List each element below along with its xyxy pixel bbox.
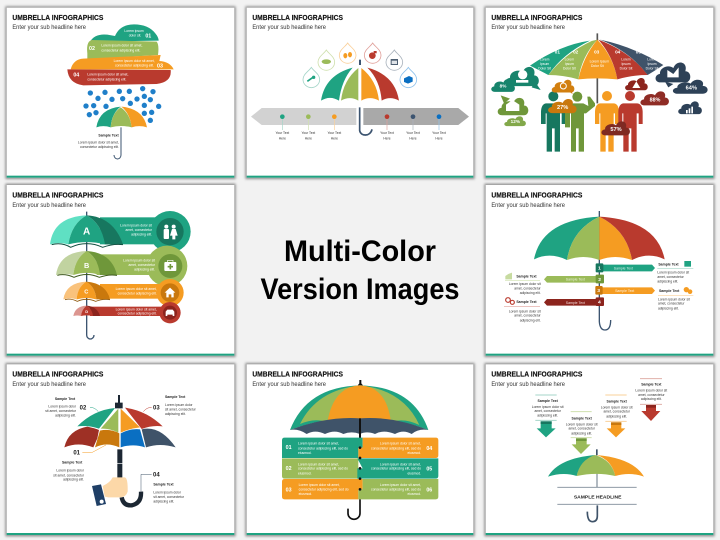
row D: Lorem ipsum dolor sit amet,: [116, 307, 157, 311]
small umbrella: [96, 107, 147, 159]
box labels: Lorem ipsum dolor sit amet,: [380, 483, 421, 487]
row D: consectetur adipiscing elit.: [118, 312, 157, 316]
timeline labels: Your Text: [432, 131, 446, 135]
box labels: eiusmod.: [298, 471, 312, 475]
tag 1: 1: [598, 266, 601, 272]
label 01: Lorem ipsum dolor: [56, 469, 85, 473]
row C: consectetur adipiscing elit.: [118, 292, 157, 296]
title: UMBRELLA INFOGRAPHICS: [252, 13, 343, 22]
box labels: consectetur adipiscing elit, sed do: [298, 446, 348, 450]
row B: adipiscing elit.: [134, 267, 155, 271]
label 03: 03: [153, 406, 160, 412]
label 04: sit amet, consectetur: [153, 495, 185, 499]
row D: D: [85, 309, 88, 314]
title: UMBRELLA INFOGRAPHICS: [12, 191, 103, 200]
sample text: [78, 134, 119, 149]
row C: [63, 279, 184, 306]
arrow column teal: amet, consectetur: [534, 409, 562, 413]
label 02: 02: [80, 406, 87, 412]
row B: Lorem ipsum dolor sit: [123, 259, 155, 263]
panel: slide 4 stacked umbrellas: [5, 184, 236, 357]
canopy: Dolor Sit: [563, 66, 576, 70]
arrow column red: amet, consectetur: [638, 393, 665, 397]
box labels: 02: [286, 466, 292, 472]
canopy: 01: [555, 49, 560, 54]
cloud: 88 percent: 88%: [650, 97, 661, 103]
layered cloud: Lorem ipsum: [124, 29, 144, 33]
arrow column teal: Lorem ipsum dolor sit: [532, 405, 564, 409]
box labels: eiusmod.: [407, 492, 421, 496]
title: UMBRELLA INFOGRAPHICS: [12, 13, 103, 22]
cloud: 27 percent: 27%: [557, 105, 568, 111]
canopy: Ipsum: [565, 62, 574, 66]
box labels: consectetur adipiscing elit, sed do: [298, 467, 348, 471]
canopy: Lorem: [540, 58, 550, 62]
canopy: 04: [615, 49, 621, 54]
arrow column red: [635, 379, 667, 421]
note: upper left: Lorem ipsum dolor sit: [509, 282, 541, 286]
arrow column green: Lorem ipsum dolor sit: [566, 423, 598, 427]
label 03: Lorem ipsum dolor: [165, 403, 193, 407]
note: top right: [657, 261, 693, 284]
note: top right: Sample Text: [658, 262, 679, 266]
panel: slide 8 arrows into umbrella: [484, 363, 715, 536]
layered cloud: consectetur adipiscing elit.: [87, 77, 126, 81]
dome umbrella: [290, 380, 428, 434]
box labels: Lorem ipsum dolor sit amet,: [380, 462, 421, 466]
row B: B: [84, 261, 89, 270]
timeline labels: Here: [409, 136, 417, 140]
subtitle: Enter your sub headline here: [12, 381, 86, 388]
arrow column teal: [532, 395, 564, 437]
row C: Lorem ipsum dolor sit amet,: [116, 287, 157, 291]
subtitle: Enter your sub headline here: [491, 202, 565, 209]
umbrella pole top: [115, 395, 123, 408]
cloud: 8 percent: [491, 79, 515, 92]
arrow column orange: Sample Text: [607, 400, 628, 404]
row A: adipiscing elit.: [131, 233, 152, 237]
box labels: consectetur adipiscing elit, sed do: [371, 487, 421, 491]
arrow column orange: adipiscing elit.: [606, 414, 627, 418]
canopy: Lorem: [647, 58, 657, 62]
box labels: eiusmod.: [407, 451, 421, 455]
box labels: Lorem ipsum dolor sit amet,: [298, 462, 339, 466]
note: lower right: Sample Text: [659, 289, 680, 293]
subtitle: Enter your sub headline here: [12, 202, 86, 209]
timeline labels: Your Text: [327, 131, 341, 135]
canopy: Dolor Sit: [646, 67, 658, 71]
subtitle: Enter your sub headline here: [252, 381, 326, 388]
canopy: [530, 40, 663, 79]
box labels: eiusmod.: [299, 492, 312, 496]
umbrella canopy: [321, 60, 399, 101]
panel: slide 7 dome umbrella with six boxes: [245, 363, 475, 536]
tag 4: 4: [598, 299, 601, 305]
label 04: Sample Text: [153, 482, 174, 486]
timeline labels: Your Text: [301, 131, 315, 135]
box labels: 03: [286, 488, 292, 494]
arrow column orange: [601, 395, 633, 437]
canopy: Lorem Ipsum: [590, 59, 609, 63]
timeline labels: Here: [383, 136, 391, 140]
sample text: consectetur adipiscing elit.: [80, 145, 119, 149]
row A: amet, consectetur: [126, 228, 153, 232]
layered cloud: consectetur adipiscing elit.: [101, 48, 140, 52]
label 02: adipiscing elit.: [55, 413, 76, 417]
cloud: 64 percent: 64%: [686, 85, 697, 91]
timeline labels: Here: [435, 136, 443, 140]
subtitle: Enter your sub headline here: [252, 24, 326, 31]
arrow column orange: amet, consectetur: [603, 410, 631, 414]
note: lower right: amet, consectetur: [658, 302, 685, 306]
timeline pins: [280, 114, 441, 130]
left arrow band: [251, 108, 356, 125]
canopy: 02: [573, 49, 579, 54]
arrow column teal: adipiscing elit.: [537, 413, 558, 417]
timeline labels: Here: [305, 136, 312, 140]
panel: slide 5 umbrella with numbered tags: [484, 184, 715, 357]
label 02: [45, 397, 87, 417]
cloud: navy bars icon: [678, 101, 702, 114]
note: lower left: Lorem ipsum dolor sit: [509, 309, 541, 313]
layered cloud: 02: [89, 46, 95, 52]
note: lower right: Lorem ipsum dolor sit: [658, 297, 690, 301]
title: UMBRELLA INFOGRAPHICS: [491, 191, 582, 200]
shaft: [117, 449, 122, 479]
row C: C: [84, 290, 88, 296]
layered cloud: Lorem ipsum dolor sit amet,: [114, 59, 155, 63]
box labels: 01: [286, 445, 292, 451]
canopy: Ipsum: [540, 62, 549, 66]
people: [541, 91, 643, 152]
rain drops: [83, 86, 161, 123]
hook: [348, 499, 360, 519]
tag 3: 3: [597, 288, 600, 294]
label 02: Lorem ipsum dolor: [48, 405, 77, 409]
tag 4: Sample Text: [566, 301, 585, 305]
layered cloud: 01: [145, 33, 151, 39]
panel: slide 1 rain cloud: [5, 6, 236, 179]
box labels: consectetur adipiscing elit, sed do: [371, 446, 421, 450]
canopy: Lorem: [565, 58, 574, 62]
pole: [595, 33, 600, 103]
note: upper left: adipiscing elit.: [520, 291, 541, 295]
note: lower left: [504, 298, 542, 322]
row B: [56, 246, 187, 286]
box labels: [286, 442, 432, 496]
arrow column green: [566, 412, 598, 454]
tag 2: Sample Text: [566, 278, 585, 282]
label 04: adipiscing elit.: [153, 500, 174, 504]
arrow column teal: Sample Text: [538, 399, 559, 403]
cloud: 57 percent: [601, 121, 630, 135]
label 04: [153, 473, 185, 504]
arrow column green: amet, consectetur: [568, 427, 596, 431]
label 01: [53, 451, 85, 482]
centre heading: Multi-Color: [284, 235, 436, 268]
icon drops: [303, 43, 417, 88]
tag 3: [595, 286, 655, 295]
box labels: consectetur adipiscing elit, sed do: [371, 467, 421, 471]
hook: [122, 492, 141, 505]
note: top right: amet, consectetur: [657, 275, 685, 279]
tag 2: [544, 275, 604, 283]
info boxes: [282, 438, 438, 499]
note: top right: Lorem ipsum dolor sit: [657, 271, 689, 275]
timeline labels: Here: [331, 136, 338, 140]
note: lower right: adipiscing elit.: [658, 306, 679, 310]
note: lower left: Sample Text: [516, 300, 537, 304]
tag 2: 2: [598, 277, 601, 283]
timeline labels: Your Text: [406, 131, 420, 135]
umbrella: [534, 211, 665, 330]
box labels: eiusmod.: [407, 471, 421, 475]
subtitle: Enter your sub headline here: [491, 24, 565, 31]
panel: slide 6 puzzle umbrella: [5, 363, 236, 536]
layered cloud: consectetur adipiscing elit.: [115, 64, 154, 68]
sample text: Sample Text: [98, 134, 119, 138]
tag 1: Sample Text: [614, 266, 633, 270]
layered cloud: Lorem ipsum dolor sit amet,: [101, 44, 142, 48]
pole: [357, 418, 363, 438]
umbrella canopy: [548, 449, 644, 487]
box labels: eiusmod.: [298, 451, 312, 455]
canopy: 05: [636, 49, 641, 54]
panel: slide 3 people under umbrella: [484, 6, 715, 179]
cloud: red warning icon: [625, 78, 648, 90]
timeline labels: Here: [279, 136, 286, 140]
cloud: green house icon: [498, 95, 528, 115]
note: upper left: Sample Text: [516, 274, 537, 278]
row A: A: [83, 226, 90, 237]
icon: people: [164, 225, 178, 239]
tag 4: [544, 297, 604, 306]
title: UMBRELLA INFOGRAPHICS: [491, 370, 582, 379]
arrow column red: Sample Text: [641, 383, 662, 387]
row A: [50, 211, 191, 252]
cloud: 12 percent: [504, 116, 526, 126]
timeline labels: Your Text: [380, 131, 394, 135]
label 03: adipiscing elit.: [165, 412, 186, 416]
box labels: consectetur adipiscing elit, sed do: [299, 487, 349, 491]
note: upper left: amet, consectetur: [514, 286, 542, 290]
canopy: Dolor Sit: [538, 67, 551, 71]
note: upper left: [505, 273, 542, 295]
cloud: 64 percent: [673, 80, 708, 94]
label 02: Sample Text: [55, 397, 76, 401]
title: UMBRELLA INFOGRAPHICS: [12, 370, 103, 379]
canopy: Ipsum: [647, 62, 657, 66]
hand: [92, 477, 128, 506]
layered cloud: [67, 24, 174, 85]
note: lower left: amet, consectetur: [514, 314, 542, 318]
cloud: 12 percent: 12%: [511, 119, 521, 124]
callout lines: [82, 407, 152, 492]
box labels: 04: [426, 446, 432, 452]
puzzle canopy: [64, 408, 176, 447]
centre heading: Version Images: [260, 273, 460, 306]
row B: amet, consectetur: [129, 263, 156, 267]
timeline labels: Your Text: [275, 131, 289, 135]
icon: house: [165, 288, 175, 297]
label 03: sit amet, consectetur: [165, 407, 197, 411]
canopy: Lorem: [621, 58, 631, 62]
label 02: sit amet, consectetur: [45, 409, 77, 413]
panel: slide 2 timeline umbrella: [245, 6, 475, 179]
arrow column red: adipiscing elit.: [641, 397, 662, 401]
layered cloud: 04: [73, 73, 79, 79]
note: lower left: adipiscing elit.: [520, 318, 541, 322]
note: top right: adipiscing elit.: [657, 280, 678, 284]
box labels: Lorem ipsum dolor sit amet,: [299, 483, 340, 487]
tag 1: [596, 263, 655, 272]
box labels: Lorem ipsum dolor sit amet,: [380, 442, 421, 446]
umbrella handle: [360, 107, 372, 135]
centre pole dots: [359, 446, 361, 491]
cloud: navy chart icon: [656, 63, 690, 87]
canopy: 03: [594, 49, 600, 54]
icon: car: [166, 310, 174, 316]
sample text: Lorem ipsum dolor sit amet,: [78, 140, 119, 144]
cloud: 8 percent: 8%: [500, 84, 507, 89]
cloud: 88 percent: [640, 91, 669, 105]
cloud: 27 percent: [548, 99, 577, 113]
label 03: [153, 395, 197, 416]
subtitle: Enter your sub headline here: [491, 381, 565, 388]
sample headline: [557, 487, 637, 504]
arrow column green: Sample Text: [572, 417, 593, 421]
canopy: Dolor Sit: [591, 64, 604, 68]
cloud: teal money icon: [506, 67, 541, 90]
box labels: 06: [426, 487, 432, 493]
note: lower right: [658, 287, 693, 310]
arrow column red: Lorem ipsum dolor sit: [635, 389, 667, 393]
title: UMBRELLA INFOGRAPHICS: [252, 370, 343, 379]
central pole: [87, 212, 94, 339]
label 01: sit amet, consectetur: [53, 473, 85, 477]
layered cloud: 03: [157, 63, 163, 69]
label 01: 01: [73, 451, 81, 457]
label 01: adipiscing elit.: [63, 478, 84, 482]
label 04: 04: [153, 473, 160, 479]
canopy: Ipsum: [621, 62, 631, 66]
box labels: Lorem ipsum dolor sit amet,: [298, 442, 339, 446]
arrow column green: adipiscing elit.: [571, 431, 592, 435]
layered cloud: Lorem ipsum dolor sit amet,: [87, 73, 128, 77]
canopy: Dolor Sit: [620, 66, 632, 70]
icon: medical case: [164, 260, 176, 271]
box labels: 05: [426, 467, 432, 473]
title: UMBRELLA INFOGRAPHICS: [491, 13, 582, 22]
cloud: orange recycle icon: [552, 80, 574, 94]
cloud: 57 percent: 57%: [610, 127, 622, 133]
right arrow band: [363, 108, 469, 125]
tag 3: Sample Text: [615, 289, 634, 293]
layered cloud: dolor sit.: [129, 33, 141, 37]
hook: [587, 505, 597, 522]
arrow column orange: Lorem ipsum dolor sit: [601, 406, 633, 410]
row D: [73, 302, 181, 323]
label 04: Lorem ipsum dolor: [153, 490, 182, 494]
row A: Lorem ipsum dolor sit: [120, 224, 152, 228]
timeline labels: [275, 131, 446, 140]
subtitle: Enter your sub headline here: [12, 24, 86, 31]
centre heading: [260, 235, 460, 306]
label 03: Sample Text: [165, 395, 186, 399]
sample headline: SAMPLE HEADLINE: [574, 494, 622, 500]
label 01: Sample Text: [62, 461, 83, 465]
